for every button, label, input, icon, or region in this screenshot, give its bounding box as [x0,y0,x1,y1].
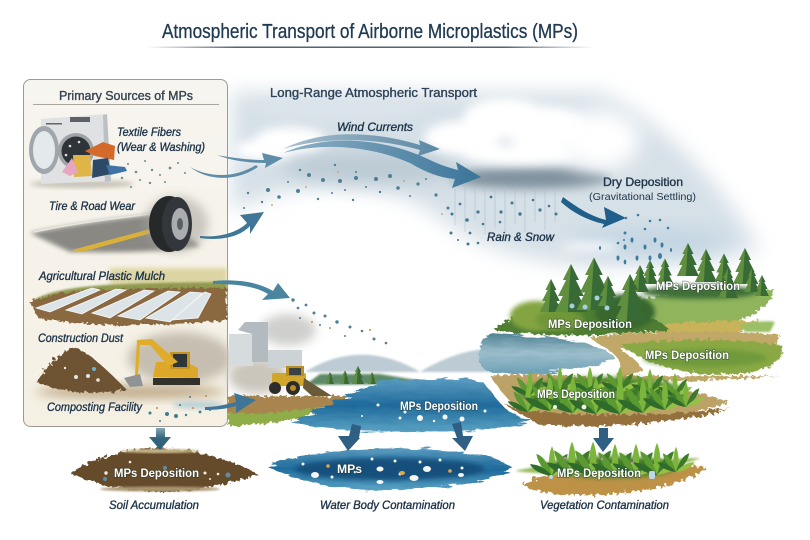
mountains and distant trees [305,349,530,385]
particles from textile [121,160,186,188]
land by river [228,396,350,426]
river particles [361,404,486,422]
near forest [495,258,670,335]
arrow: wind current upper [283,134,440,156]
label: dry deposition: (Gravitational Settling) [589,191,696,203]
airborne particle arc [243,164,450,215]
sky background [232,92,760,266]
title: Atmospheric Transport of Airborne Microplastics (MPs) [162,21,578,43]
label: MPs deposition meadow: MPs Deposition [656,279,740,293]
arrow: plants to vegetation [593,428,614,452]
label: wind currents: Wind Currents [337,122,413,134]
label: MPs deposition crops: MPs Deposition [645,348,729,362]
label: MPs deposition forest: MPs Deposition [548,317,632,331]
bulldozer [269,366,332,396]
label: construction dust: Construction Dust [38,333,124,345]
field path and crops [590,321,783,381]
vegetation contamination patch [515,442,706,495]
label: composting facility: Composting Facility [47,402,143,414]
label: tire and road wear: Tire & Road Wear [49,201,136,213]
panel background [24,80,228,426]
arrow: dry deposition [561,197,626,228]
water body contamination patch [267,448,512,490]
rain and snow [450,186,558,246]
panel: primary sources of MPs [24,80,232,426]
arrow: composting to river [205,393,256,413]
river [290,379,533,432]
label: long-range atmospheric transport: Long-Range Atmospheric Transport [270,86,478,100]
icon: plastic mulch field [30,268,227,325]
far forest and meadow [630,243,775,337]
icon: washing machine with clothes [29,114,134,188]
factory and smoke [228,314,316,394]
arrow: panel to soil [149,428,171,450]
caption: water body contamination: Water Body Contamination [320,500,455,512]
label: MPs deposition plants: MPs Deposition [537,387,615,401]
arrow: river to water left [338,424,361,451]
icon: road and tire [30,196,208,252]
panel heading: Primary Sources of MPs [59,88,193,103]
clouds [235,98,620,252]
title underline [146,46,594,48]
label: textile fibers: (Wear & Washing) [117,142,205,154]
arrow: textile fibers to wind [190,153,283,178]
label: MPs deposition vegetation: MPs Deposition [557,466,641,480]
particles from composting [148,395,224,422]
plants patch near river [490,367,730,426]
label: MPs in water: MPs [337,462,362,476]
arrow: river to water right [452,422,473,451]
mulch particle stream [291,298,387,344]
label: MPs deposition soil: MPs Deposition [114,466,199,480]
caption: soil accumulation: Soil Accumulation [109,500,199,512]
label: textile fibers: Textile Fibers [117,127,181,139]
caption: vegetation contamination: Vegetation Contamination [540,500,669,512]
icon: soil pile and excavator [35,332,232,399]
label: MPs deposition river: MPs Deposition [400,399,478,413]
label: agricultural plastic mulch: Agricultural Plastic Mulch [38,271,165,283]
label: rain and snow: Rain & Snow [487,232,555,244]
arrow: tire to atmosphere [200,212,264,239]
lake [479,333,615,374]
dry deposition droplets [599,214,672,264]
label: dry deposition: Dry Deposition [603,175,683,189]
arrow: wind current lower [283,141,481,188]
soil accumulation patch [70,448,258,492]
arrow: mulch to atmosphere [213,280,290,300]
